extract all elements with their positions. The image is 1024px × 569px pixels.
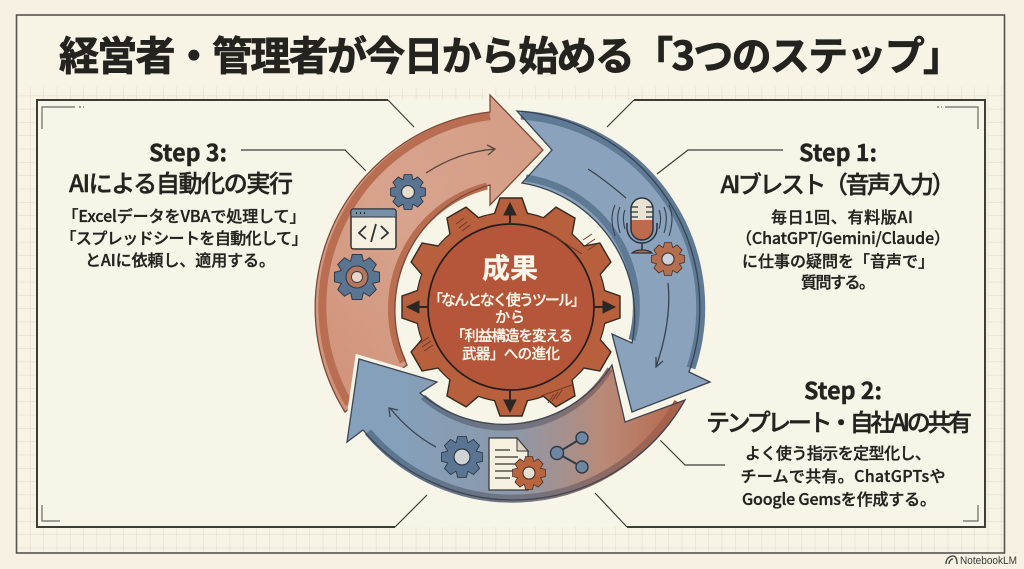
center text: から (495, 306, 525, 327)
inner frame panel (37, 100, 985, 527)
icon: gear upper terracotta (391, 175, 425, 209)
step 1 text block: 質問する。 (801, 269, 875, 293)
cycle diagram (315, 95, 710, 500)
step 1 text block: （ChatGPT/Gemini/Claude） (736, 225, 950, 249)
step 3 text block: とAIに依頼し、適用する。 (85, 247, 275, 271)
icon: gear lower terracotta (335, 255, 379, 299)
center text: 「利益構造を変える (451, 325, 573, 346)
corner brackets (42, 107, 978, 521)
step 1 text block: AIブレスト（音声入力） (720, 165, 956, 200)
center text: 成果 (482, 247, 538, 287)
step 1 text block (720, 134, 956, 293)
step 2 text block: Google Gemsを作成する。 (742, 486, 936, 510)
center text (428, 247, 586, 364)
gear arrows (407, 203, 615, 412)
icon: code window (351, 209, 396, 249)
step 2 text block: チームで共有。ChatGPTsや (740, 463, 946, 487)
step 3 text block: Step 3: (149, 134, 227, 168)
icon: gear bottom (442, 437, 482, 477)
arrow: step 2 gradient (347, 359, 685, 500)
icon: gear right blue (652, 243, 684, 275)
title: 経営者・管理者が今日から始める「3つのステップ」 (59, 24, 963, 82)
step 2 text block: よく使う指示を定型化し、 (745, 440, 931, 464)
step 3 text block (60, 134, 308, 271)
logo: NotebookLM: NotebookLM (960, 555, 1017, 567)
step 3 text block: AIによる自動化の実行 (69, 164, 293, 199)
arrow: step 3 terracotta (315, 95, 543, 412)
step 1 text block: Step 1: (799, 134, 877, 168)
arrow: step 1 blue (517, 111, 710, 412)
step 1 text block: に仕事の疑問を「音声で」 (742, 248, 934, 272)
step 2 text block: Step 2: (804, 372, 882, 406)
step 2 text block (706, 372, 972, 510)
step 3 text block: 「スプレッドシートを自動化して」 (60, 225, 308, 249)
step 2 text block: テンプレート・自社AIの共有 (706, 403, 972, 438)
center text: 「なんとなく使うツール」 (428, 289, 586, 310)
step 3 text block: 「ExcelデータをVBAで処理して」 (62, 203, 306, 227)
step 1 text block: 毎日1回、有料版AI (771, 204, 913, 228)
gear hatching (420, 218, 597, 403)
icon: document with gear (489, 438, 545, 490)
central gear (402, 198, 620, 416)
icon: microphone (612, 198, 672, 253)
icon: share (550, 432, 588, 473)
center text: 武器」への進化 (462, 343, 560, 364)
connector lines (241, 100, 783, 527)
